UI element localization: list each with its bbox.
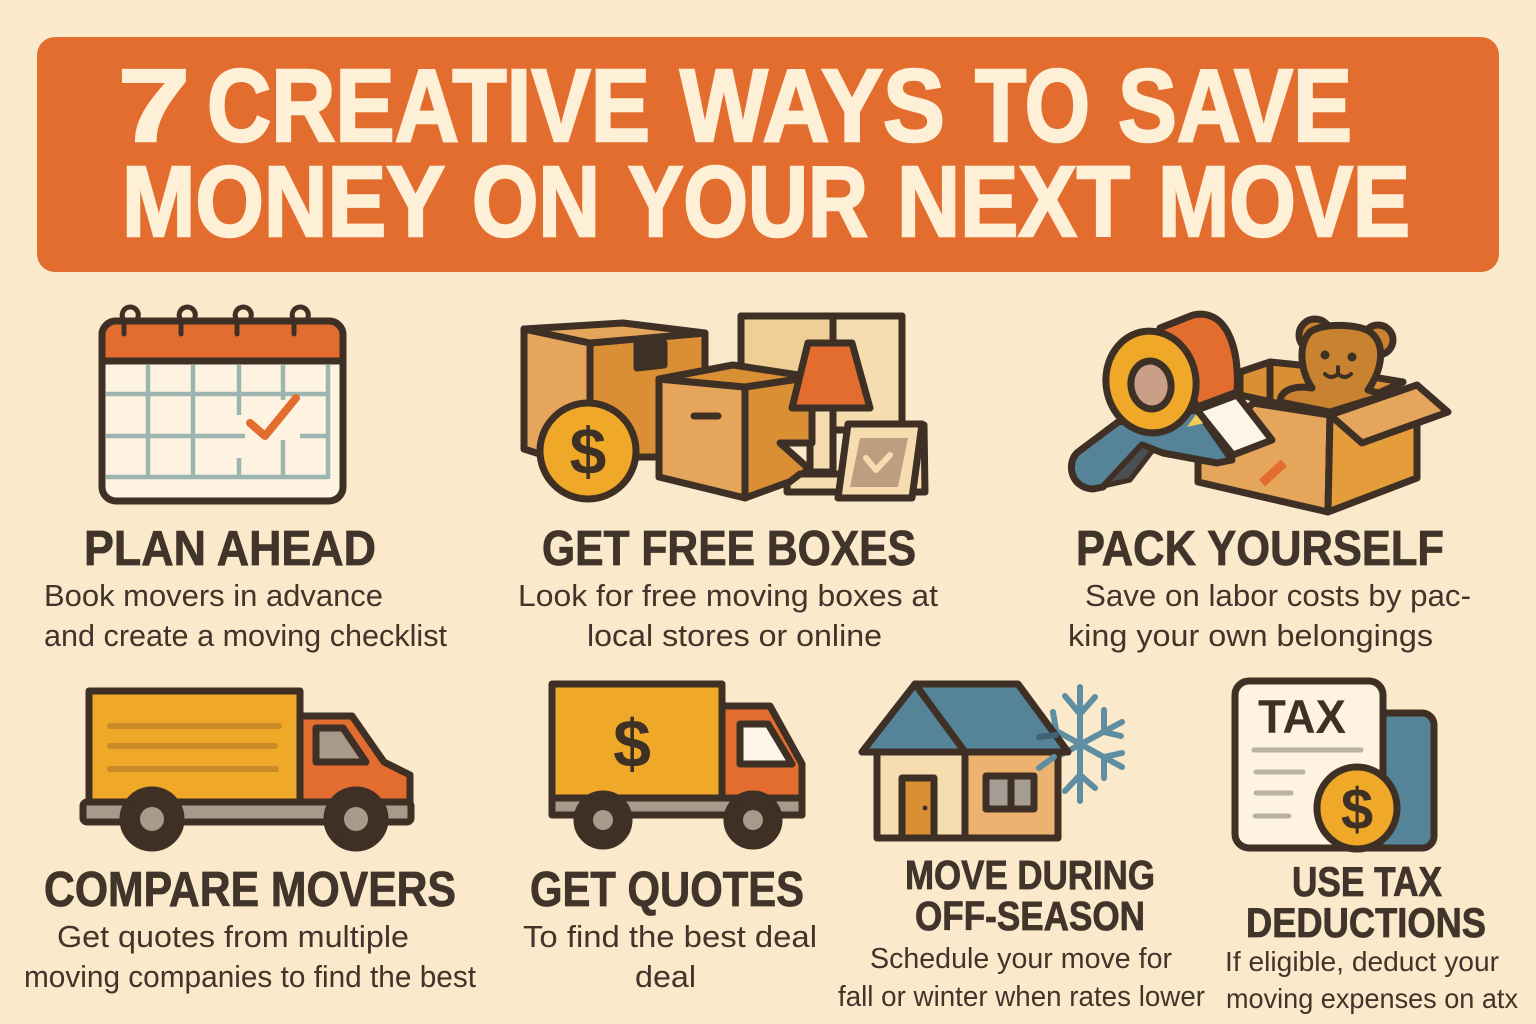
title: ON (472, 146, 600, 258)
title: 7 (118, 48, 190, 163)
description (518, 578, 938, 653)
panel: get free boxes (518, 316, 938, 653)
description: king your own belongings (1068, 618, 1433, 653)
icon: boxes, lamp, frame and coin (524, 316, 925, 499)
description (1068, 578, 1471, 653)
heading (1246, 858, 1486, 946)
heading: DEDUCTIONS (1246, 899, 1486, 946)
title: MONEY (122, 146, 445, 258)
heading: USE TAX (1292, 858, 1442, 905)
description: local stores or online (587, 618, 882, 653)
description: Get quotes from multiple (57, 919, 409, 954)
description (838, 943, 1205, 1013)
icon: tax document with coin: $ (1341, 777, 1373, 842)
description: moving expenses on atx (1226, 983, 1518, 1014)
panel: compare movers (24, 691, 476, 994)
description (1225, 946, 1518, 1014)
icon: truck with dollar sign (552, 684, 802, 846)
title: CREATIVE (207, 48, 650, 163)
description (24, 919, 476, 994)
heading: PLAN AHEAD (84, 522, 376, 576)
heading: OFF-SEASON (915, 893, 1145, 939)
icon: truck with dollar sign: $ (613, 706, 651, 782)
title (118, 48, 1410, 258)
description: fall or winter when rates lower (838, 981, 1205, 1013)
title: MOVE (1158, 146, 1410, 258)
icon: tax document with coin (1235, 681, 1434, 849)
description: Look for free moving boxes at (518, 578, 938, 613)
title banner (37, 37, 1499, 272)
heading: MOVE DURING (905, 852, 1155, 898)
icon: tape dispenser and open box with teddy bear (1071, 314, 1448, 512)
description: deal (635, 959, 696, 994)
icon: tax document with coin: TAX (1258, 690, 1346, 743)
title: WAYS (680, 48, 945, 163)
icon: moving truck (83, 691, 411, 848)
description (44, 578, 447, 653)
description: Book movers in advance (44, 578, 383, 613)
icon: house (862, 684, 1068, 838)
heading: COMPARE MOVERS (44, 863, 456, 917)
panel: pack yourself (1068, 314, 1471, 653)
title: TO (975, 48, 1090, 163)
panel: use tax deductions (1225, 681, 1518, 1014)
icon: boxes, lamp, frame and coin: $ (570, 414, 606, 488)
description: To find the best deal (523, 919, 817, 954)
panel: move during off-season (838, 684, 1205, 1013)
description: Schedule your move for (870, 943, 1172, 975)
icon: calendar (102, 307, 343, 501)
heading (905, 852, 1155, 939)
title: YOUR (628, 146, 868, 258)
heading: PACK YOURSELF (1076, 522, 1444, 576)
description (523, 919, 817, 994)
title: NEXT (897, 146, 1130, 258)
panel: get quotes (523, 684, 817, 994)
description: moving companies to find the best (24, 959, 476, 994)
heading: GET FREE BOXES (542, 522, 916, 576)
icon: snowflake (1040, 687, 1122, 801)
description: and create a moving checklist (44, 618, 447, 653)
title: SAVE (1118, 48, 1352, 163)
description: Save on labor costs by pac- (1085, 578, 1471, 613)
description: If eligible, deduct your (1225, 946, 1499, 977)
heading: GET QUOTES (530, 863, 804, 917)
panel: plan ahead (44, 307, 447, 653)
